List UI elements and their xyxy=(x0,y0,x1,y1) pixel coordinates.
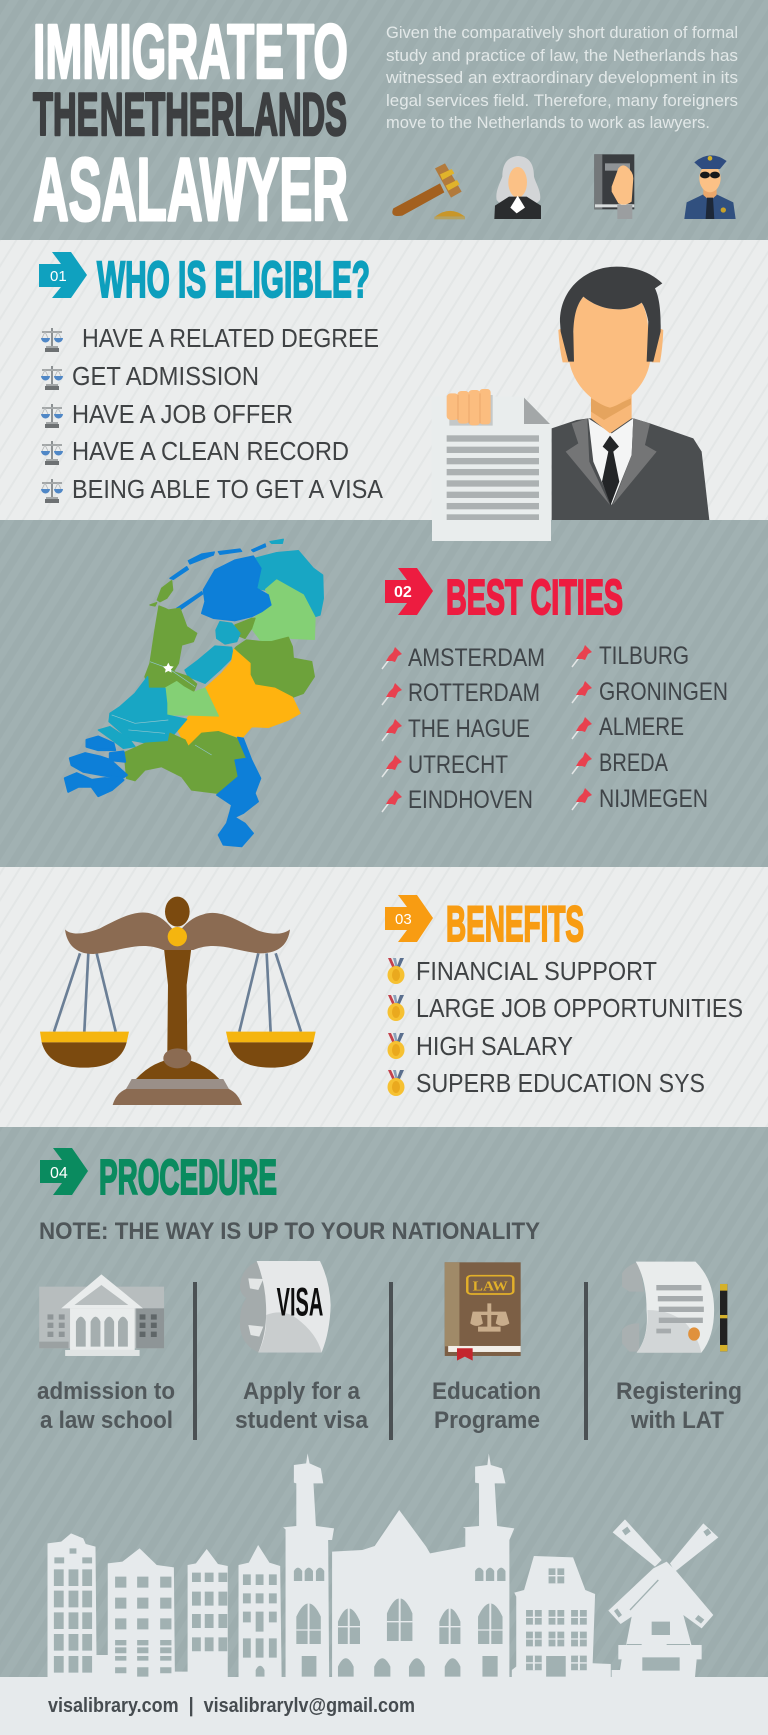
city list: UTRECHT xyxy=(408,751,508,779)
intro paragraph xyxy=(385,23,738,132)
icon: law school building xyxy=(39,1274,164,1356)
icon: gavel xyxy=(392,163,465,219)
city list: ALMERE xyxy=(599,713,684,741)
title xyxy=(33,9,348,239)
city list: THE HAGUE xyxy=(408,715,530,743)
intro paragraph: legal services field. Therefore, many foreigners xyxy=(386,91,738,110)
step labels: Apply for a xyxy=(243,1378,361,1405)
heading: procedure: PROCEDURE xyxy=(99,1151,277,1205)
benefit list xyxy=(388,956,743,1098)
heading: who is eligible: WHO IS ELIGIBLE? xyxy=(97,251,370,308)
panel: who is eligible xyxy=(0,240,768,540)
benefit list: HIGH SALARY xyxy=(416,1031,573,1061)
city list: BREDA xyxy=(599,749,668,777)
panel: header xyxy=(0,0,768,240)
badge 02: 02 xyxy=(394,584,412,601)
illustration: Dutch skyline xyxy=(48,1453,718,1677)
city list xyxy=(382,642,728,814)
city list: GRONINGEN xyxy=(599,678,728,706)
panel: procedure xyxy=(0,1127,768,1735)
icon: certificate and pen xyxy=(622,1262,727,1353)
step labels: Education xyxy=(432,1378,541,1405)
heading: best cities: BEST CITIES xyxy=(446,571,623,625)
step labels: a law school xyxy=(40,1407,173,1434)
step labels: with LAT xyxy=(630,1407,724,1434)
note: NOTE: THE WAY IS UP TO YOUR NATIONALITY xyxy=(39,1218,540,1245)
eligibility list: HAVE A JOB OFFER xyxy=(72,399,293,429)
city list: EINDHOVEN xyxy=(408,786,533,814)
icon: scales of justice xyxy=(40,897,316,1105)
badge 03: 03 xyxy=(395,911,412,928)
city list: TILBURG xyxy=(599,642,689,670)
badge 01 xyxy=(39,252,87,298)
eligibility list: BEING ABLE TO GET A VISA xyxy=(72,474,384,504)
intro paragraph: Given the comparatively short duration of formal xyxy=(386,23,738,42)
city list: NIJMEGEN xyxy=(599,785,708,813)
badge 02 xyxy=(385,568,433,615)
step labels xyxy=(37,1378,742,1434)
title: AS A LAWYER xyxy=(33,139,348,239)
benefit list: SUPERB EDUCATION SYS xyxy=(416,1068,705,1098)
badge 03 xyxy=(385,895,433,942)
icon: visa scroll: VISA xyxy=(277,1281,323,1325)
step labels: student visa xyxy=(235,1407,369,1434)
divider xyxy=(584,1282,588,1440)
step labels: admission to xyxy=(37,1378,175,1405)
panel: best cities xyxy=(0,520,768,867)
map of the Netherlands xyxy=(65,539,323,847)
intro paragraph: move to the Netherlands to work as lawyers. xyxy=(386,113,710,132)
divider xyxy=(389,1282,393,1440)
eligibility list xyxy=(41,323,384,504)
title: IMMIGRATE TO xyxy=(33,9,348,95)
city list: ROTTERDAM xyxy=(408,679,540,707)
icon: judge xyxy=(494,156,541,219)
eligibility list: GET ADMISSION xyxy=(72,361,259,391)
divider xyxy=(193,1282,197,1440)
footer band xyxy=(0,1677,768,1735)
illustration: windmill xyxy=(608,1519,718,1677)
step labels: Registering xyxy=(616,1378,742,1405)
badge 01: 01 xyxy=(50,268,67,285)
icon: law book: LAW xyxy=(473,1278,508,1294)
benefit list: FINANCIAL SUPPORT xyxy=(416,956,657,986)
footer contact text: visalibrary.com | visalibrarylv@gmail.com xyxy=(48,1695,415,1717)
panel: benefits xyxy=(0,867,768,1127)
step labels: Programe xyxy=(434,1407,540,1434)
intro paragraph: study and practice of law, the Netherlands has xyxy=(386,46,738,65)
document lower edge xyxy=(432,520,551,541)
heading: benefits: BENEFITS xyxy=(446,896,584,952)
eligibility list: HAVE A CLEAN RECORD xyxy=(72,436,349,466)
city list: AMSTERDAM xyxy=(408,644,545,672)
icon: visa scroll xyxy=(240,1261,331,1352)
icon: oath on book xyxy=(594,154,634,219)
badge 04: 04 xyxy=(50,1165,68,1182)
icon: lawyer with document xyxy=(432,267,709,540)
intro paragraph: witnessed an extraordinary development in its xyxy=(385,68,738,87)
icon: police officer xyxy=(684,155,736,219)
title: THE NETHERLANDS xyxy=(33,81,347,148)
icon: law book xyxy=(445,1262,521,1361)
badge 04 xyxy=(40,1148,88,1195)
eligibility list: HAVE A RELATED DEGREE xyxy=(82,323,379,353)
